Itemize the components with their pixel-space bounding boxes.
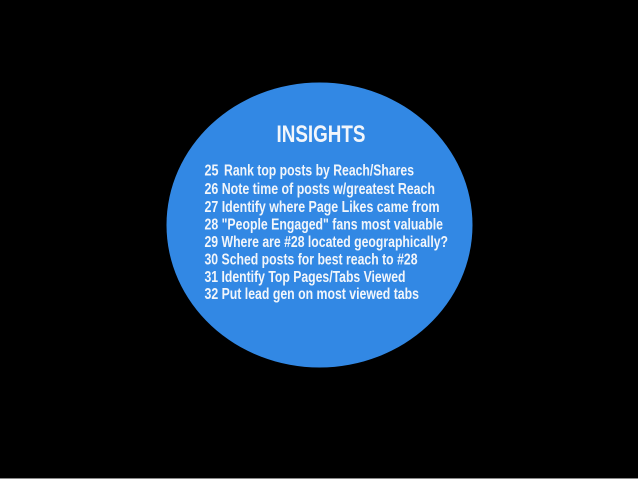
panel: blue circle bbox=[166, 82, 472, 368]
item 31: 31 Identify Top Pages/Tabs Viewed bbox=[204, 269, 406, 286]
item 32: 32 Put lead gen on most viewed tabs bbox=[204, 286, 419, 303]
item 25: 25 bbox=[204, 162, 219, 180]
checklist text block bbox=[204, 162, 448, 303]
item 29: 29 Where are #28 located geographically? bbox=[204, 234, 448, 251]
title: INSIGHTS bbox=[276, 121, 366, 148]
item 30: 30 Sched posts for best reach to #28 bbox=[204, 252, 418, 268]
item 28: 28 "People Engaged" fans most valuable bbox=[204, 216, 443, 234]
item 25: Rank top posts by Reach/Shares bbox=[224, 162, 414, 180]
item 27: 27 Identify where Page Likes came from bbox=[204, 199, 440, 216]
item 26: 26 Note time of posts w/greatest Reach bbox=[204, 181, 435, 198]
